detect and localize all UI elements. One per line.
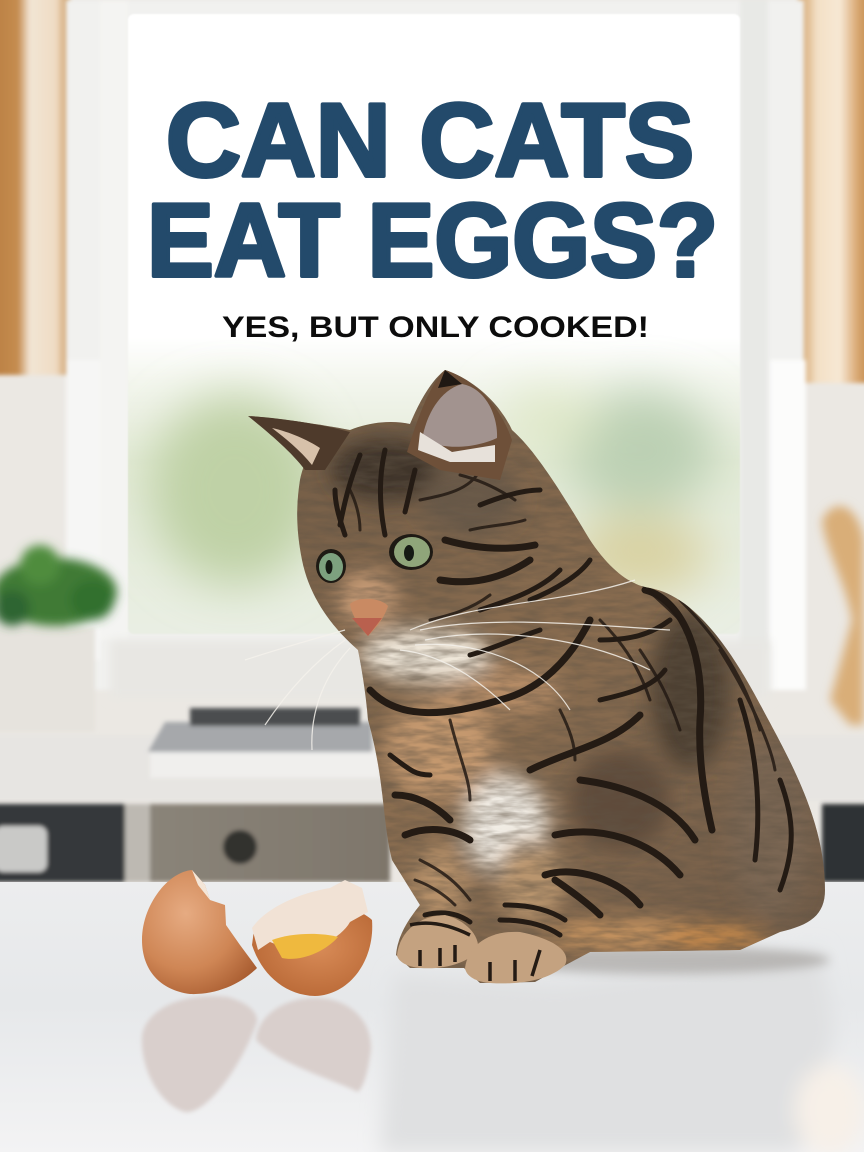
subtitle: YES, BUT ONLY COOKED!: [222, 311, 649, 344]
egg reflections: [142, 996, 371, 1112]
title line 1: CAN CATS: [166, 83, 694, 199]
stove: [148, 708, 380, 778]
back counter: [0, 735, 864, 801]
left wooden cabinet: [0, 0, 70, 375]
windowsill: [110, 640, 770, 698]
fur texture overlay: [297, 370, 825, 983]
cat left eye: [316, 549, 346, 583]
eggshell right half with yolk: [252, 880, 372, 996]
foreground white counter: [0, 882, 864, 1152]
wooden utensil: [822, 506, 864, 725]
plant in white pot: [0, 545, 117, 732]
title line 2: EAT EGGS?: [147, 183, 718, 299]
eggshell left half: [142, 870, 257, 994]
right wooden cabinet: [798, 0, 864, 383]
cat right eye: [389, 534, 433, 570]
cat reflection on counter: [380, 950, 864, 1152]
lower cabinets: [0, 804, 864, 882]
left ear: [248, 416, 350, 470]
window frame: [66, 0, 806, 690]
whiskers: [245, 580, 670, 750]
right ear: [407, 370, 512, 480]
tabby stripes: [335, 450, 791, 935]
cat nose: [350, 599, 388, 636]
cat body silhouette and markings: [240, 360, 840, 1000]
cat paws: [397, 915, 566, 983]
cat: [240, 360, 840, 1000]
cat shadow on counter: [490, 946, 830, 974]
window pane with blurred garden: [128, 14, 740, 634]
title: [147, 83, 718, 299]
